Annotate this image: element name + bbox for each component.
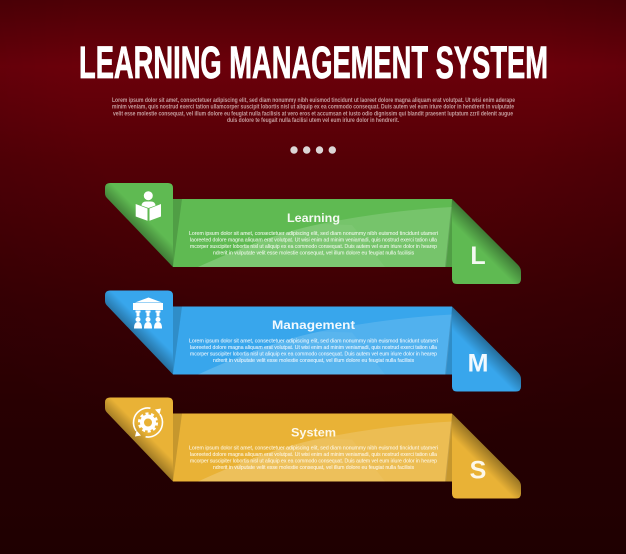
left tab	[105, 398, 173, 482]
icon: gear with circular arrows	[128, 402, 168, 443]
icon: institution with people	[133, 298, 163, 328]
band	[173, 414, 452, 482]
icon: reader with open book	[136, 191, 161, 221]
intro paragraph: velit esse molestie consequat, vel illum dolore eu feugiat nulla facilisis at vero eros et accumsan et iusto odio dignissim qui blandit praesent luptatum zzril delenit augue	[113, 111, 514, 117]
body text: laoreeted dolore magna aliquam erat volutpat. Ut wisi enim ad minim veniamadi, quis nostrud exerci tation ulla	[190, 238, 438, 244]
body text	[189, 446, 438, 471]
heading: Learning	[287, 211, 340, 225]
body text: Lorem ipsum dolor sit amet, consectetuer adipiscing elit, sed diam nonummy nibh euismod tincidunt utameri	[189, 446, 438, 452]
body text: mcorper suscipiter lobortis nisl ut aliquip ex ea commodo consequat. Duis autem vel eum iriure dolor in hearep	[190, 458, 437, 464]
right tab	[452, 306, 521, 392]
pagination dots	[290, 146, 336, 154]
right tab	[452, 199, 521, 284]
intro paragraph: minim veniam, quis nostrud exerci tation ullamcorper suscipit lobortis nisl ut aliquip ex ea commodo consequat. Duis autem vel eum iriure dolor in hendrerit in vulputate	[112, 105, 515, 111]
intro paragraph	[112, 98, 516, 124]
band	[173, 199, 452, 267]
letter S: S	[470, 456, 486, 484]
panel: system	[105, 398, 521, 498]
intro paragraph: Lorem ipsum dolor sit amet, consectetuer adipiscing elit, sed diam nonummy nibh euismod tincidunt ut laoreet dolore magna aliquam erat volutpat. Ut wisi enim aderape	[112, 98, 516, 104]
body text: ndrerit in vulputate velit esse molestie consequat, vel illum dolore eu feugiat nulla facilisis	[213, 250, 414, 256]
body text: ndrerit in vulputate velit esse molestie consequat, vel illum dolore eu feugiat nulla facilisis	[213, 465, 414, 471]
body text: laoreeted dolore magna aliquam erat volutpat. Ut wisi enim ad minim veniamadi, quis nostrud exerci tation ulla	[190, 345, 438, 351]
body text: mcorper suscipiter lobortis nisl ut aliquip ex ea commodo consequat. Duis autem vel eum iriure dolor in hearep	[190, 244, 437, 250]
left tab	[105, 290, 173, 374]
band	[173, 306, 452, 374]
body text	[189, 231, 438, 256]
letter L: L	[470, 242, 486, 270]
panel: learning	[105, 183, 521, 284]
heading: Management	[272, 318, 355, 332]
left tab	[105, 183, 173, 267]
body text	[189, 338, 438, 364]
letter M: M	[468, 350, 488, 378]
intro paragraph: duis dolore te feugait nulla facilisi utem vel eum iriure dolor in hendrerit.	[227, 118, 399, 124]
body text: mcorper suscipiter lobortis nisl ut aliquip ex ea commodo consequat. Duis autem vel eum iriure dolor in hearep	[190, 352, 437, 358]
panel: management	[105, 290, 521, 392]
body text: ndrerit in vulputate velit esse molestie consequat, vel illum dolore eu feugiat nulla facilisis	[213, 358, 414, 364]
body text: Lorem ipsum dolor sit amet, consectetuer adipiscing elit, sed diam nonummy nibh euismod tincidunt utameri	[189, 338, 438, 344]
right tab	[452, 414, 521, 498]
body text: Lorem ipsum dolor sit amet, consectetuer adipiscing elit, sed diam nonummy nibh euismod tincidunt utameri	[189, 231, 438, 237]
body text: laoreeted dolore magna aliquam erat volutpat. Ut wisi enim ad minim veniamadi, quis nostrud exerci tation ulla	[190, 452, 438, 458]
heading: System	[291, 426, 336, 440]
